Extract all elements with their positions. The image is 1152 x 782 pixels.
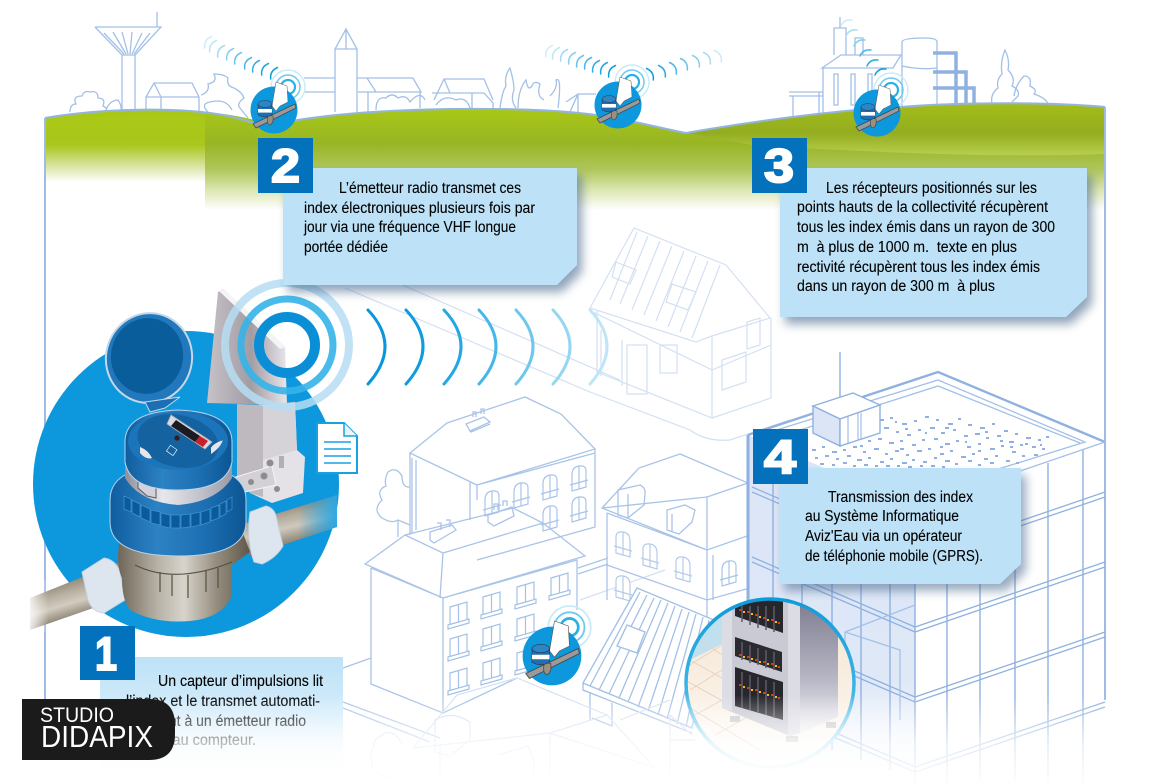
status leds xyxy=(739,610,780,698)
Studio Didapix logo xyxy=(22,699,175,760)
trees right xyxy=(992,50,1048,104)
roads xyxy=(343,262,790,742)
server shelves xyxy=(735,600,783,633)
number 3 badge xyxy=(752,138,807,193)
right hill darker crest xyxy=(686,103,1105,155)
mini meter icon 2 xyxy=(250,70,305,134)
collar clip xyxy=(138,478,156,498)
water tower xyxy=(95,12,161,110)
panel 4 text: Transmission des index xyxy=(828,489,973,506)
tree xyxy=(377,470,410,537)
signal trail from icon 4 xyxy=(841,20,886,75)
panel 3 text: rectivité récupèrent tous les index émis xyxy=(797,259,1040,276)
panel 3 text: points hauts de la collectivité récupèrent xyxy=(797,199,1049,216)
left hill green gradient xyxy=(45,110,205,185)
left pipe nut xyxy=(82,558,125,613)
meter background circle xyxy=(33,331,339,637)
index document icon xyxy=(317,423,357,473)
meter brass body xyxy=(118,525,250,622)
panel 1 xyxy=(100,657,343,775)
panel 2 shadow xyxy=(288,175,582,292)
rooftop hutch with antenna xyxy=(813,352,880,446)
tank scaffolding xyxy=(933,53,974,105)
panel 3 text: dans un rayon de 300 m à plus xyxy=(797,278,995,295)
factory and tanks xyxy=(789,17,901,116)
body ribs xyxy=(135,562,232,598)
panel 3 xyxy=(780,168,1087,317)
ground line xyxy=(45,103,1105,133)
dial red dot xyxy=(174,435,180,441)
panel 4 text: de téléphonie mobile (GPRS). xyxy=(805,548,983,565)
silver collar xyxy=(125,455,232,505)
building: office tower xyxy=(748,352,1105,782)
panel 3 text xyxy=(797,180,1055,295)
server room inset xyxy=(680,590,854,767)
number 3 badge: 3 xyxy=(764,139,794,192)
Studio Didapix logo: DIDAPIX xyxy=(41,719,153,754)
panel 1 text: couplé au compteur. xyxy=(126,732,256,749)
number 4 badge xyxy=(753,429,808,484)
left pipe xyxy=(30,560,125,630)
mini meter icon in town xyxy=(523,606,591,685)
panel 2 text: jour via une fréquence VHF longue xyxy=(303,219,516,236)
panel 4 text: au Système Informatique xyxy=(805,508,959,525)
panel 1 text: Un capteur d’impulsions lit xyxy=(158,673,324,690)
frame right edge xyxy=(1104,107,1106,700)
panel 2 text: index électroniques plusieurs fois par xyxy=(304,200,535,217)
panel 1 text xyxy=(126,673,324,749)
panel 1 background xyxy=(100,657,343,775)
hinged lid xyxy=(95,303,203,413)
panel 3 text: Les récepteurs positionnés sur les xyxy=(826,180,1037,197)
brand mark xyxy=(166,445,177,456)
cap top face xyxy=(128,412,228,470)
right pipe xyxy=(240,495,337,556)
left pipe white fade xyxy=(26,580,76,632)
frame left edge xyxy=(44,118,46,700)
house: lower front faint xyxy=(370,678,695,782)
building: front apartment xyxy=(365,501,585,713)
radio signal rings xyxy=(225,283,349,407)
mini meter icon 3 xyxy=(594,65,649,128)
number 2 badge: 2 xyxy=(271,139,300,192)
counter window xyxy=(167,415,212,449)
dial face xyxy=(132,407,224,475)
signal trail left of icon 3 xyxy=(546,46,616,77)
house: back faint xyxy=(590,228,771,418)
signal trail from icon 2 xyxy=(205,36,278,79)
radio wave arcs xyxy=(368,310,607,384)
panel 3 text: tous les index émis dans un rayon de 300 xyxy=(797,219,1055,236)
rack front xyxy=(722,602,788,735)
hatched roof xyxy=(583,588,714,733)
ring teeth xyxy=(124,496,232,528)
rack side xyxy=(800,606,838,728)
cap xyxy=(125,410,232,490)
cap clips xyxy=(140,447,152,458)
panel 2 text xyxy=(303,180,535,256)
bottom fade xyxy=(0,695,1152,782)
building: right apartment xyxy=(602,454,750,630)
number 2 badge xyxy=(258,138,313,193)
panel 4 text: Aviz'Eau via un opérateur xyxy=(805,528,962,545)
church and row houses xyxy=(304,29,596,116)
panel 3 shadow xyxy=(785,175,1092,324)
blue ring xyxy=(110,465,246,556)
panel 1 text: l’index et le transmet automati- xyxy=(126,693,320,710)
right pipe blue fade xyxy=(298,495,337,540)
roof gravel speckle xyxy=(812,417,1049,467)
panel 3 text: m à plus de 1000 m. texte en plus xyxy=(797,239,1017,256)
right pipe nut xyxy=(249,506,283,564)
number 4 badge: 4 xyxy=(764,430,796,483)
town skyline outlines xyxy=(70,12,1048,118)
water meter xyxy=(26,303,337,632)
houses and trees left of hill xyxy=(70,74,248,118)
panel 1 text: quement à un émetteur radio xyxy=(126,713,306,730)
panel 2 text: L’émetteur radio transmet ces xyxy=(339,180,521,197)
panel 4 xyxy=(779,468,1021,584)
rack wheels xyxy=(730,716,836,742)
wall xyxy=(691,616,722,660)
Studio Didapix logo: STUDIO xyxy=(40,704,114,727)
panel 2 xyxy=(283,168,577,285)
panel 4 text xyxy=(805,489,983,565)
panel 2 text: portée dédiée xyxy=(304,239,388,256)
transmitter antenna xyxy=(207,289,305,503)
number 1 badge xyxy=(80,626,135,680)
floor tiles xyxy=(688,640,760,750)
panel 4 shadow xyxy=(784,475,1026,591)
central and right hills green gradient xyxy=(205,103,1105,212)
building: back apartment xyxy=(410,397,595,560)
signal trail right of icon 3 xyxy=(646,50,721,80)
number 1 badge: 1 xyxy=(95,627,117,680)
mini meter icon 4 xyxy=(854,73,908,136)
